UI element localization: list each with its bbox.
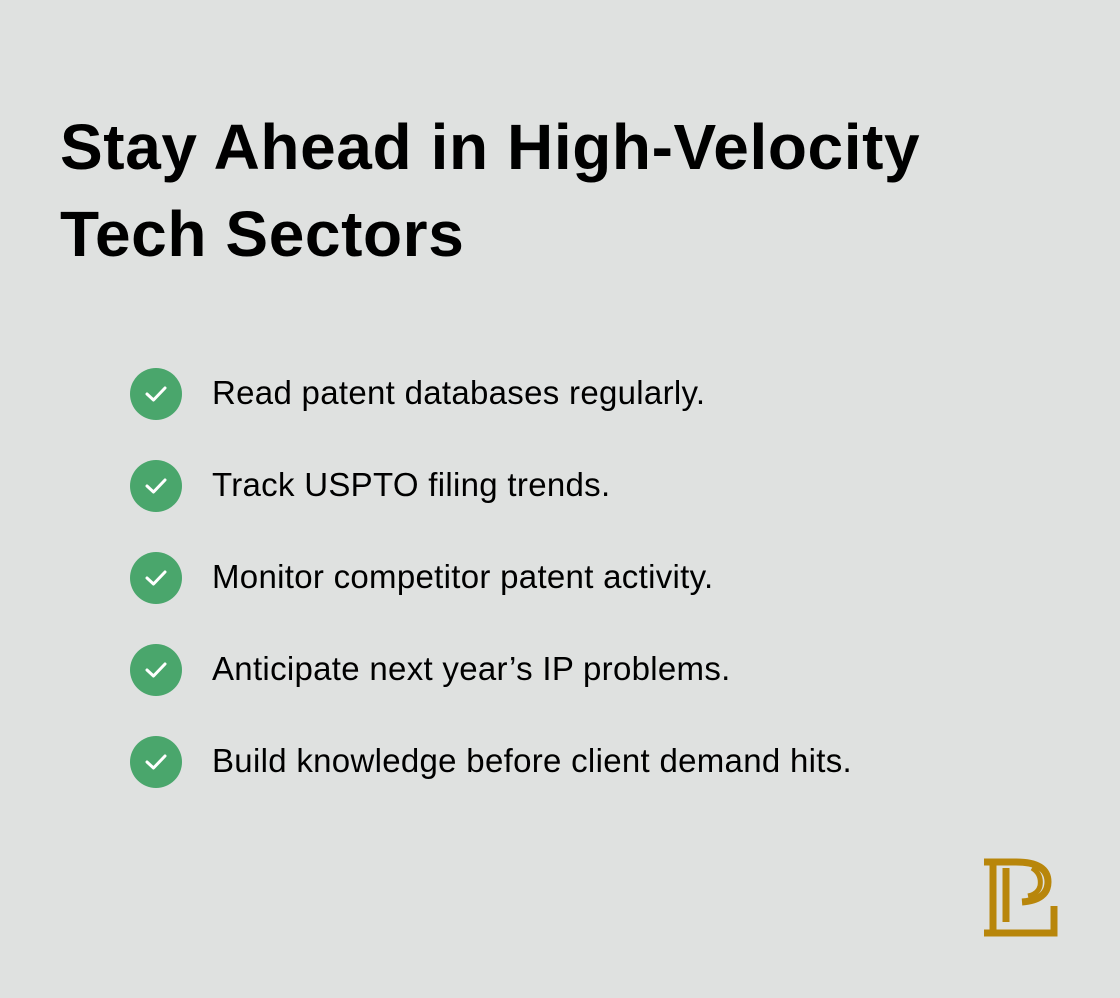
title: Stay Ahead in High-Velocity xyxy=(60,111,920,183)
item 3 xyxy=(130,552,713,604)
item 5 xyxy=(130,736,852,788)
item 2 xyxy=(130,460,610,512)
item 1 xyxy=(130,368,705,420)
checklist xyxy=(130,368,852,788)
item 5: Build knowledge before client demand hits. xyxy=(212,742,852,779)
title xyxy=(60,111,920,270)
item 1: Read patent databases regularly. xyxy=(212,374,705,411)
item 3: Monitor competitor patent activity. xyxy=(212,558,713,595)
item 4 xyxy=(130,644,731,696)
item 4: Anticipate next year’s IP problems. xyxy=(212,650,731,687)
title: Tech Sectors xyxy=(60,198,464,270)
logo xyxy=(984,858,1058,936)
item 2: Track USPTO filing trends. xyxy=(212,466,610,503)
